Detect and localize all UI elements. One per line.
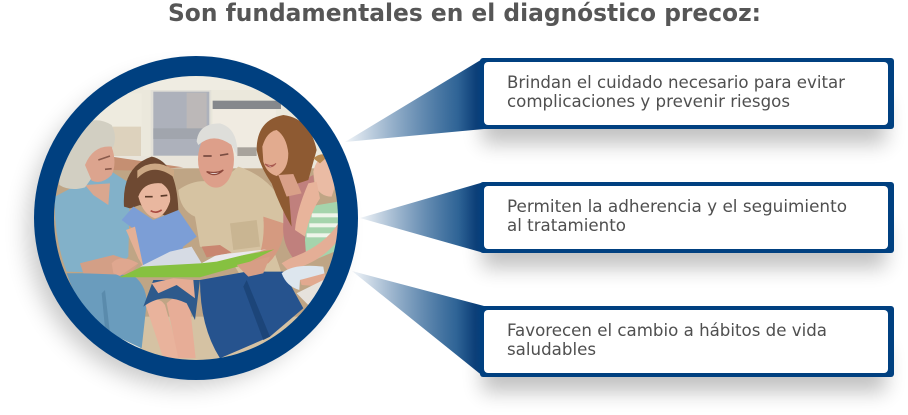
grandfather jeans bbox=[200, 272, 303, 358]
taper bbox=[360, 182, 490, 253]
child bbox=[313, 157, 336, 197]
text: complicaciones y prevenir riesgos bbox=[507, 92, 790, 111]
grandmother shirt bbox=[55, 172, 130, 273]
shadow bbox=[482, 100, 886, 144]
taper bbox=[352, 271, 490, 377]
woman face bbox=[262, 130, 288, 176]
girl legs bbox=[145, 300, 180, 358]
callout 3 bbox=[352, 271, 894, 392]
grandmother's arm behind bbox=[112, 157, 183, 171]
callout 2 bbox=[360, 182, 894, 268]
text: Favorecen el cambio a hábitos de vida bbox=[507, 321, 827, 340]
grandmother hair bbox=[59, 120, 115, 189]
box bbox=[480, 306, 894, 377]
taper bbox=[345, 58, 490, 142]
grandmother face bbox=[85, 147, 114, 182]
box bbox=[480, 58, 894, 129]
callout 1 bbox=[345, 58, 894, 144]
woman hair bbox=[257, 115, 317, 227]
text: al tratamiento bbox=[507, 216, 626, 235]
girl face bbox=[138, 183, 170, 218]
girl hair bbox=[124, 157, 178, 218]
text: Permiten la adherencia y el seguimiento bbox=[507, 197, 847, 216]
grandfather head bbox=[198, 138, 234, 188]
grandmother jeans bbox=[67, 273, 147, 348]
text: Brindan el cuidado necesario para evitar bbox=[507, 73, 845, 92]
circular family photo bbox=[28, 56, 358, 386]
book bbox=[119, 249, 274, 277]
circle ring bbox=[34, 56, 358, 380]
shadow bbox=[482, 348, 886, 392]
grandfather shirt bbox=[178, 167, 285, 280]
box bbox=[480, 182, 894, 253]
girl dress bbox=[122, 207, 197, 267]
text: saludables bbox=[507, 340, 596, 359]
circle shadow bbox=[28, 74, 340, 386]
shadow bbox=[482, 224, 886, 268]
photo: family reading a book on a sofa bbox=[50, 73, 343, 367]
woman top bbox=[283, 175, 317, 258]
